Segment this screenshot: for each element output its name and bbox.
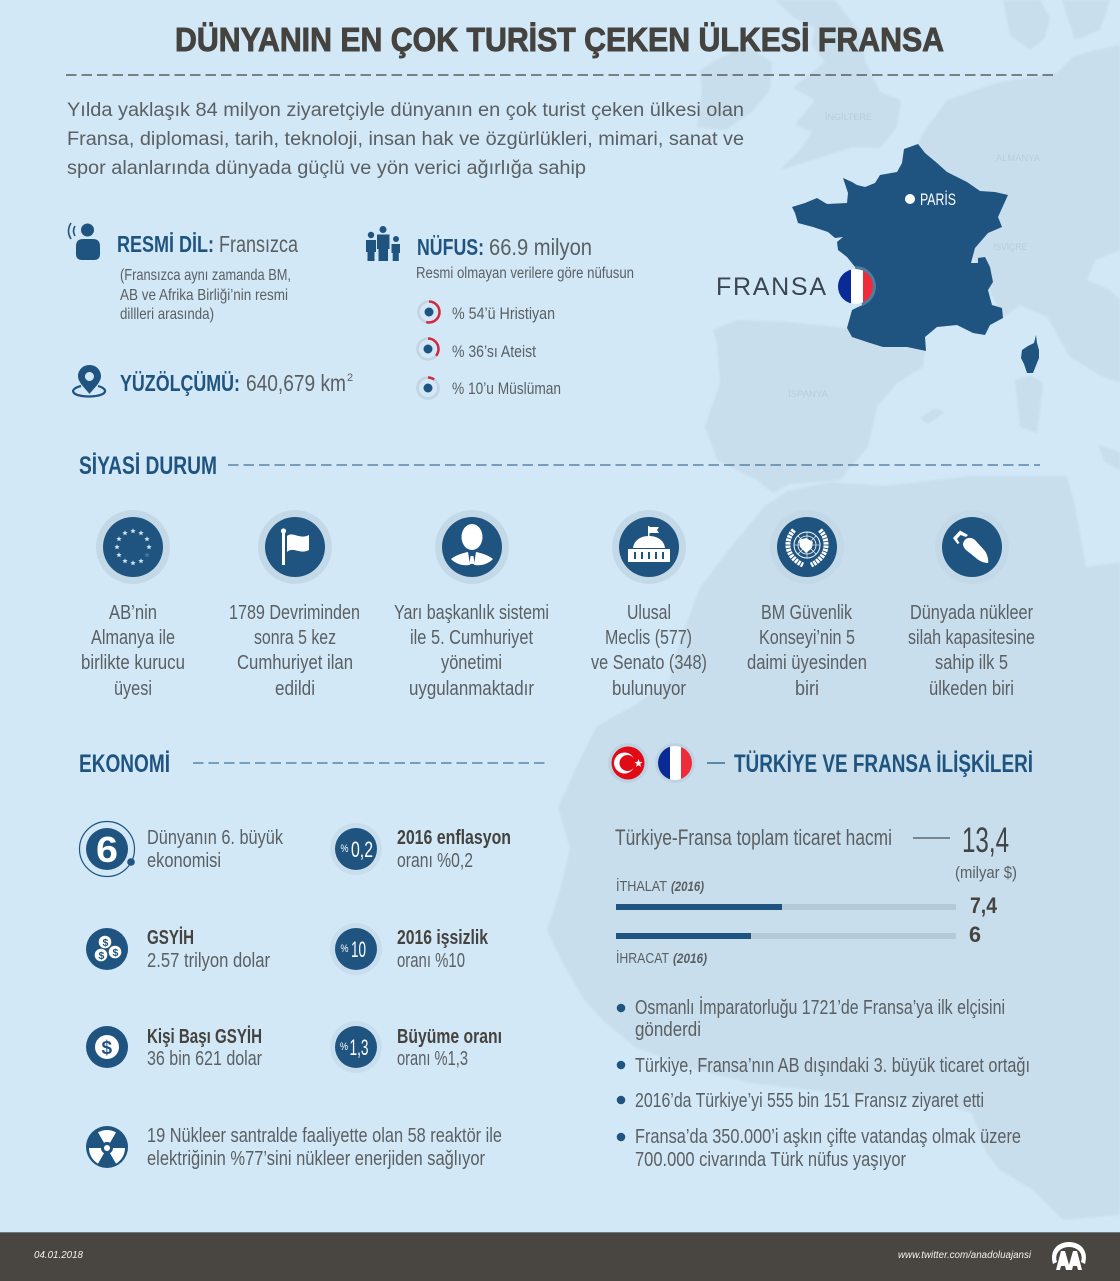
- economy item: growth: [330, 1021, 502, 1073]
- official language block: [68, 223, 298, 323]
- trade chart: (milyar $): [955, 863, 1017, 882]
- icon: parliament building: [628, 526, 670, 562]
- economy item: GDP per capita: Kişi Başı GSYİH: [147, 1025, 262, 1048]
- bullet list: 2016’da Türkiye’yi 555 bin 151 Fransız ziyaret etti: [635, 1090, 984, 1112]
- area block: 2: [347, 372, 353, 384]
- trade chart: 6: [969, 922, 981, 947]
- icon: flag: [281, 528, 309, 565]
- bullet list: Türkiye, Fransa’nın AB dışındaki 3. büyük ticaret ortağı: [635, 1055, 1030, 1077]
- icon: EU stars: [114, 528, 152, 565]
- economy item: nuclear energy: [86, 1125, 502, 1170]
- trade chart: (2016): [671, 878, 704, 894]
- area block: YÜZÖLÇÜMÜ:: [120, 370, 240, 396]
- politics item: parliament: bulunuyor: [612, 678, 686, 700]
- intro paragraph: Fransa, diplomasi, tarih, teknoloji, insan hak ve özgürlükleri, mimari, sanat ve: [67, 129, 744, 150]
- bullet list: gönderdi: [635, 1019, 701, 1041]
- official language block: (Fransızca aynı zamanda BM,: [120, 267, 291, 284]
- population block: 66.9 milyon: [489, 234, 592, 260]
- icon: UN emblem: [788, 530, 826, 565]
- icon: French flag: [655, 743, 695, 783]
- economy item: 6th largest: [80, 822, 284, 876]
- trade chart: 7,4: [970, 893, 998, 918]
- politics item: UN: daimi üyesinden: [747, 652, 867, 674]
- intro paragraph: Yılda yaklaşık 84 milyon ziyaretçiyle dünyanın en çok turist çeken ülkesi olan: [67, 100, 744, 121]
- politics item: nuclear: sahip ilk 5: [935, 652, 1008, 674]
- Paris marker: [905, 190, 956, 209]
- bullet list: Fransa’da 350.000’i aşkın çifte vatandaş olmak üzere: [635, 1126, 1021, 1148]
- bullet list: Osmanlı İmparatorluğu 1721’de Fransa’ya ilk elçisini: [635, 996, 1005, 1019]
- politics item: UN: BM Güvenlik: [761, 602, 853, 624]
- politics item: UN: biri: [795, 678, 819, 700]
- economy item: GDP: [86, 926, 270, 972]
- economy item: inflation: %: [340, 843, 349, 855]
- trade chart: [615, 821, 1017, 967]
- official language block: AB ve Afrika Birliği’nin resmi: [120, 287, 288, 304]
- footer: [0, 1232, 1120, 1281]
- donut: 54 percent Christian: [418, 302, 440, 322]
- politics item: parliament: Meclis (577): [605, 627, 692, 649]
- donut: 36 percent atheist: [418, 338, 438, 360]
- economy item: growth: %: [340, 1041, 348, 1053]
- politics item: semi-presidential: uygulanmaktadır: [409, 678, 534, 700]
- economy item: nuclear energy: 19 Nükleer santralde faaliyette olan 58 reaktör ile: [147, 1125, 502, 1147]
- map labels on neighbouring countries: İSPANYA: [788, 389, 828, 399]
- politics item: semi-presidential: ile 5. Cumhuriyet: [410, 627, 533, 649]
- economy item: GDP: 2.57 trilyon dolar: [147, 950, 270, 972]
- economy item: inflation: oranı %0,2: [397, 850, 473, 872]
- politics item: revolution: edildi: [275, 678, 315, 700]
- economy item: growth: 1,3: [350, 1035, 368, 1060]
- politics item: revolution: sonra 5 kez: [254, 627, 336, 649]
- economy item: growth: oranı %1,3: [397, 1048, 468, 1070]
- trade chart: 13,4: [962, 821, 1009, 860]
- icon: coins: $: [102, 937, 108, 949]
- icon: coins: $: [112, 947, 118, 959]
- economy item: 6th largest: 6: [96, 829, 118, 870]
- population block: % 54’ü Hristiyan: [452, 304, 555, 323]
- economy item: inflation: [330, 823, 511, 875]
- icon: speaking person: [68, 223, 100, 260]
- icon: AA logo: [1052, 1242, 1086, 1270]
- politics item: parliament: ve Senato (348): [591, 652, 707, 674]
- economy item: GDP per capita: [86, 1025, 262, 1070]
- politics item: nuclear: silah kapasitesine: [908, 627, 1035, 649]
- icon: bomb: [953, 530, 988, 563]
- bar: import: [616, 904, 956, 910]
- economy item: inflation: 0,2: [351, 837, 373, 862]
- official language block: dillleri arasında): [120, 306, 214, 323]
- heading: economy: EKONOMİ: [79, 750, 170, 778]
- icon: radiation: [89, 1130, 125, 1164]
- economy item: unemployment: %: [340, 943, 349, 955]
- politics item: semi-presidential: yönetimi: [441, 652, 502, 674]
- economy item: 6th largest: Dünyanın 6. büyük: [147, 827, 284, 849]
- heading: political situation: SİYASİ DURUM: [79, 452, 217, 480]
- France label with flag: FRANSA: [716, 273, 826, 301]
- map labels on neighbouring countries: [788, 112, 1040, 399]
- economy item: unemployment: [330, 923, 489, 975]
- title: DÜNYANIN EN ÇOK TURİST ÇEKEN ÜLKESİ FRANSA: [175, 21, 944, 58]
- politics item: semi-presidential: Yarı başkanlık sistemi: [394, 602, 549, 624]
- population block: % 10’u Müslüman: [452, 379, 561, 398]
- population block: Resmi olmayan verilere göre nüfusun: [416, 265, 634, 282]
- trade chart: İTHALAT: [616, 877, 667, 895]
- population block: % 36’sı Ateist: [452, 342, 536, 361]
- Paris marker: PARİS: [920, 190, 956, 209]
- politics item: EU: [81, 510, 185, 700]
- politics item: semi-presidential: [394, 510, 549, 700]
- footer: 04.01.2018: [34, 1250, 83, 1261]
- map labels on neighbouring countries: İNGİLTERE: [825, 112, 872, 122]
- trade chart: Türkiye-Fransa toplam ticaret hacmi: [615, 825, 892, 850]
- icon: Corsica: [1021, 335, 1039, 373]
- economy item: GDP: GSYİH: [147, 926, 194, 949]
- politics item: EU: AB’nin: [109, 602, 157, 624]
- heading: Turkey and France relations: [608, 743, 1033, 783]
- economy item: inflation: 2016 enflasyon: [397, 827, 511, 849]
- economy item: unemployment: oranı %10: [397, 950, 465, 972]
- bullet list: [617, 996, 1030, 1171]
- population block: [366, 226, 634, 398]
- economy item: unemployment: 10: [351, 937, 366, 962]
- official language block: Fransızca: [219, 231, 298, 257]
- politics item: nuclear: Dünyada nükleer: [910, 602, 1033, 624]
- politics item: parliament: Ulusal: [627, 602, 671, 624]
- population block: NÜFUS:: [417, 234, 484, 260]
- economy item: GDP per capita: 36 bin 621 dolar: [147, 1048, 262, 1070]
- economy item: nuclear energy: elektriğinin %77’sini nükleer enerjiden sağlıyor: [147, 1148, 485, 1170]
- official language block: RESMİ DİL:: [117, 231, 214, 257]
- trade chart: İHRACAT: [616, 949, 669, 967]
- map labels on neighbouring countries: İSVİÇRE: [993, 242, 1027, 252]
- donut: 10 percent Muslim: [418, 378, 438, 398]
- area block: [73, 365, 353, 396]
- politics item: revolution: [229, 510, 360, 700]
- icon: Turkish flag: [608, 743, 648, 783]
- area block: 640,679 km: [246, 370, 346, 396]
- economy item: growth: Büyüme oranı: [397, 1026, 502, 1048]
- icon: location pin: [73, 365, 105, 396]
- icon: president: [451, 524, 493, 565]
- politics item: nuclear: [908, 510, 1035, 700]
- intro paragraph: [67, 100, 744, 179]
- economy item: 6th largest: ekonomisi: [147, 850, 221, 872]
- icon: coins: [95, 936, 121, 962]
- politics item: revolution: Cumhuriyet ilan: [237, 652, 353, 674]
- economy item: unemployment: 2016 işsizlik: [397, 927, 489, 949]
- map: France: [792, 144, 1039, 373]
- footer: www.twitter.com/anadoluajansi: [898, 1250, 1032, 1261]
- heading: Turkey and France relations: TÜRKİYE VE FRANSA İLİŞKİLERİ: [734, 749, 1033, 778]
- politics item: EU: üyesi: [114, 678, 152, 700]
- politics item: UN: Konseyi’nin 5: [759, 627, 855, 649]
- icon: people: [366, 226, 400, 261]
- bar: export: [616, 933, 956, 939]
- politics item: EU: Almanya ile: [91, 627, 175, 649]
- intro paragraph: spor alanlarında dünyada güçlü ve yön verici ağırlığa sahip: [67, 158, 586, 179]
- bullet list: 700.000 civarında Türk nüfus yaşıyor: [635, 1149, 906, 1171]
- France label with flag: [716, 266, 876, 307]
- politics item: UN: [747, 510, 867, 700]
- icon: coins: $: [98, 950, 104, 962]
- map labels on neighbouring countries: ALMANYA: [996, 153, 1040, 163]
- trade chart: (2016): [673, 950, 707, 966]
- politics item: EU: birlikte kurucu: [81, 652, 185, 674]
- politics item: revolution: 1789 Devriminden: [229, 602, 360, 624]
- politics item: nuclear: ülkeden biri: [929, 678, 1014, 700]
- politics item: parliament: [591, 510, 707, 700]
- economy item: GDP per capita: $: [102, 1038, 112, 1059]
